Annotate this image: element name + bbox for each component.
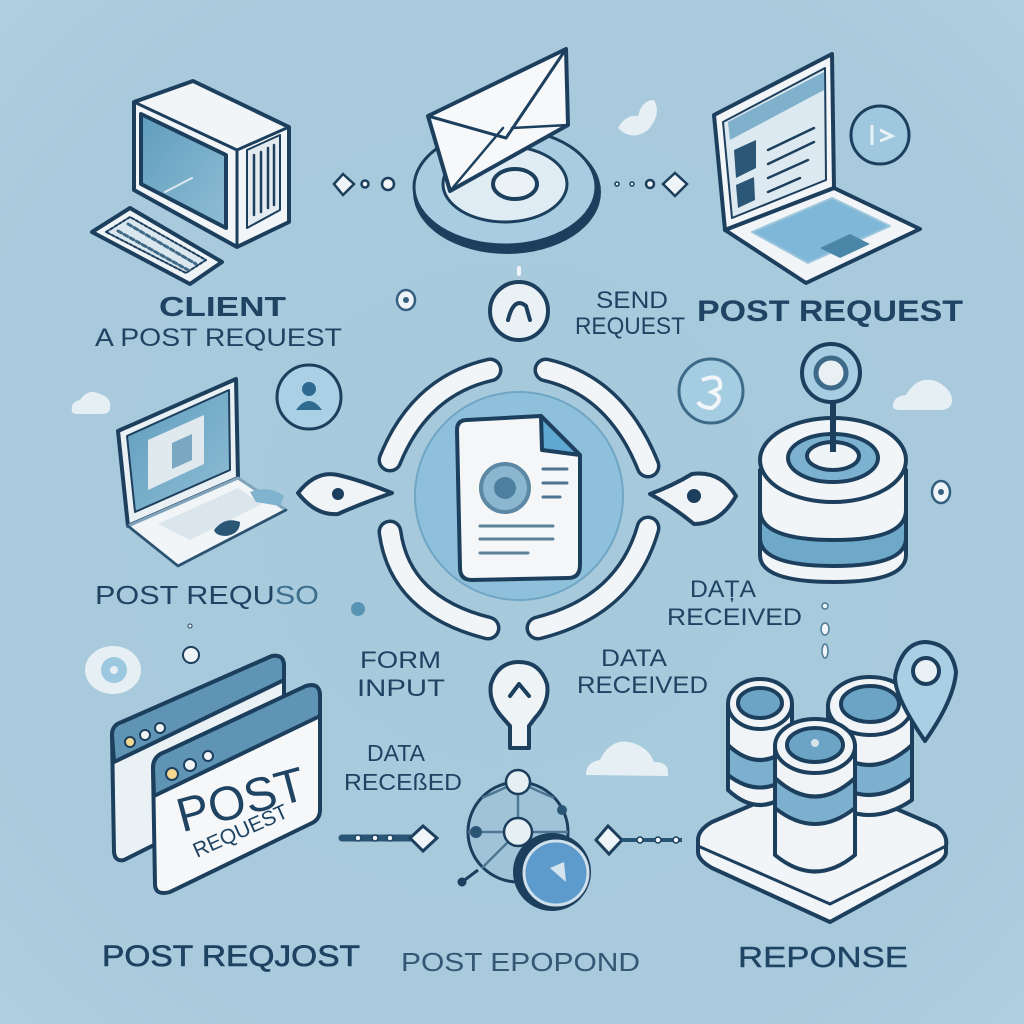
label: post reqjost: POST REQJOST <box>102 940 360 973</box>
label: reponse: REPONSE <box>738 942 908 974</box>
label: post on window: POST <box>171 758 311 843</box>
icon: location cloud <box>85 646 141 694</box>
icon: browser windows <box>112 656 320 893</box>
connector: right vertical dots <box>821 603 829 658</box>
connector: bottom right dots <box>596 826 682 854</box>
icon: bottom node <box>490 662 548 748</box>
icon: user badge <box>277 365 341 429</box>
icon: top node <box>490 268 548 340</box>
label: post request heading: POST REQUEST <box>697 295 963 328</box>
decoration: cloud right <box>893 380 952 410</box>
label: data received center: DATA <box>601 645 667 672</box>
icon: document <box>457 416 580 580</box>
decoration: small cloud top <box>618 100 657 136</box>
label: data received center: RECEIVED <box>577 672 708 699</box>
label: form input <box>357 647 445 702</box>
icon: database cluster <box>698 642 956 922</box>
icon: desktop computer <box>92 81 289 284</box>
label: data received right: RECEIVED <box>667 604 802 631</box>
icon: number badge <box>679 359 743 423</box>
label: a post request: A POST REQUEST <box>95 324 342 352</box>
label: data received right: DAȚA <box>690 576 756 603</box>
label: data received center <box>577 645 708 699</box>
icon: left node <box>298 474 392 514</box>
icon: small ring right <box>932 481 950 503</box>
label: data receed <box>344 740 462 795</box>
label: post requso: POST REQU SO <box>95 580 319 610</box>
icon: database with pin <box>760 344 906 582</box>
icon: badge top right <box>851 106 909 164</box>
connector: bottom left dots <box>342 826 437 851</box>
icon: small dot <box>351 602 365 616</box>
decoration: cloud left <box>72 392 110 414</box>
label: send request: SEND <box>596 287 668 314</box>
icon: laptop with page <box>714 54 920 283</box>
icon: laptop left <box>118 379 286 566</box>
label: send request <box>575 287 685 340</box>
label: form input: INPUT <box>357 675 445 702</box>
connector: left vertical dots <box>183 624 199 663</box>
connector: top left dots <box>334 174 394 195</box>
label: data receed: DATA <box>367 740 426 766</box>
icon: small ring left of top node <box>397 290 415 310</box>
connector: top right dots <box>615 173 687 196</box>
label: client: CLIENT <box>159 291 286 322</box>
central circle <box>415 392 623 600</box>
label: post eponnd: POST EPOPOND <box>401 947 640 977</box>
label: post on window: REQUEST <box>190 800 292 863</box>
icon: network globe with magnifier <box>458 770 591 911</box>
label: form input: FORM <box>360 647 441 674</box>
icon: right node <box>650 473 736 524</box>
decoration: cloud bottom <box>586 742 668 776</box>
label: data receed: RECEßED <box>344 769 462 795</box>
icon: envelope on disc <box>413 49 601 254</box>
central ring: arcs <box>390 370 648 628</box>
label: data received right <box>667 576 802 631</box>
label: send request: REQUEST <box>575 313 685 340</box>
